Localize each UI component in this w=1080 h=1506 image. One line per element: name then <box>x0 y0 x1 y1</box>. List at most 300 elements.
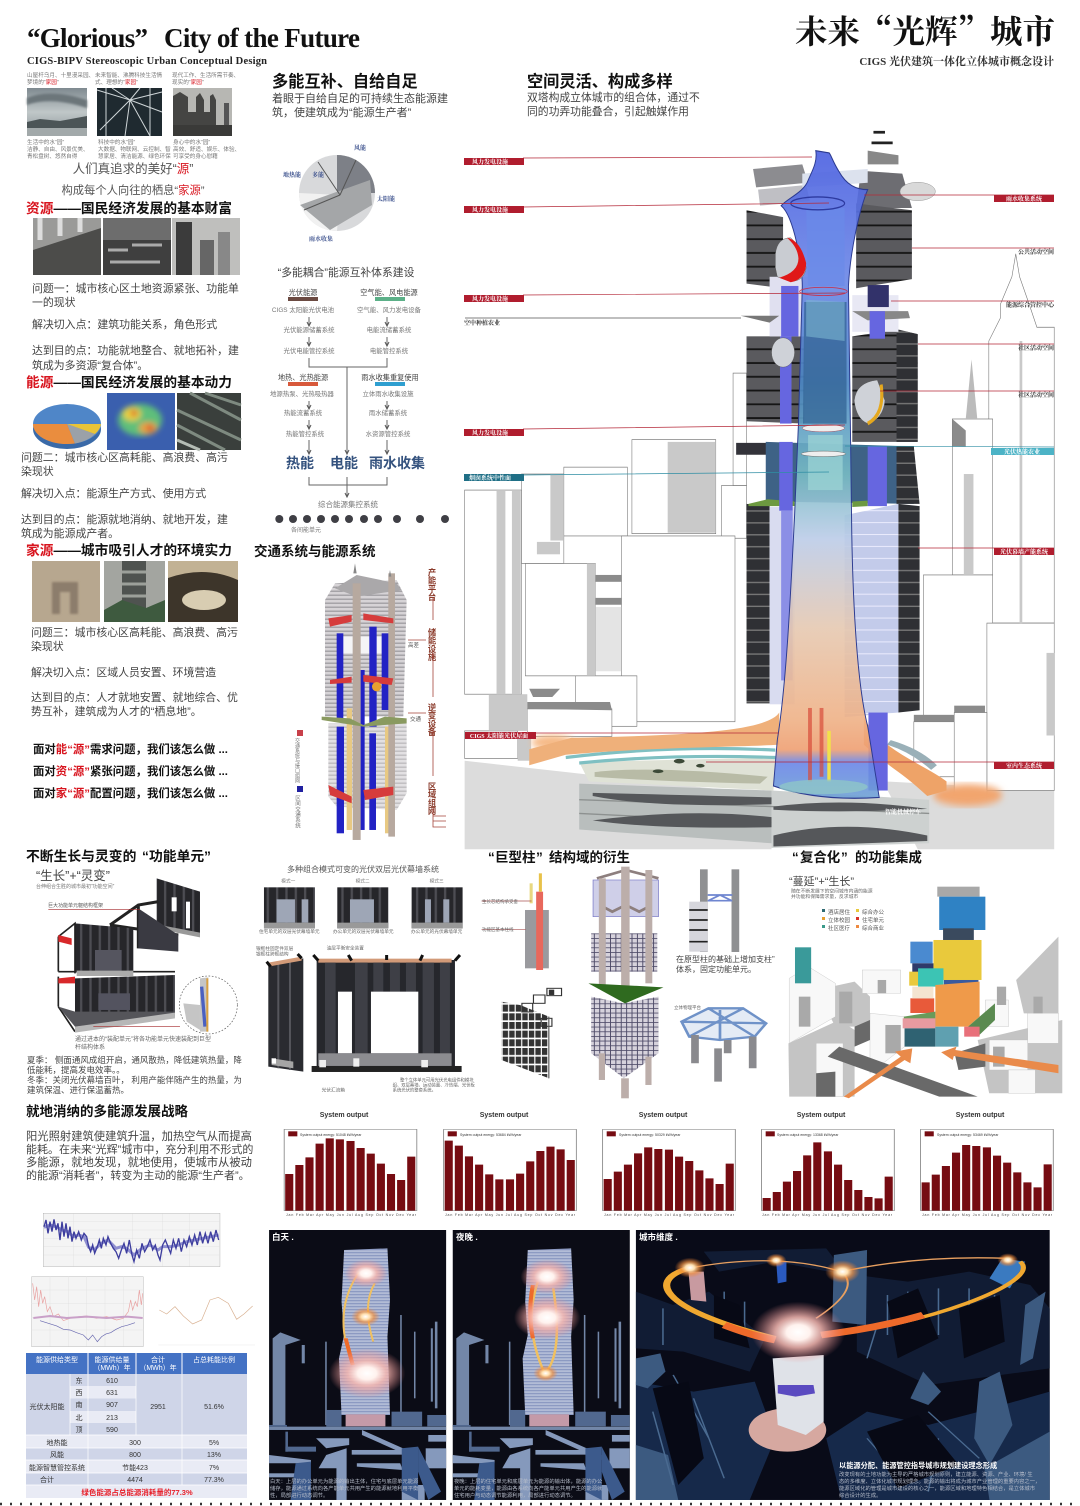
text: local consumption strategy: 的能源“消耗者”，转变为主动的能源“生产者”。 <box>26 1168 250 1182</box>
text: local consumption strategy: 阳光照射建筑使建筑升温，加热空气从而提高 <box>26 1129 252 1143</box>
column notes <box>482 898 701 1011</box>
flow: rain branch: 雨水储蓄系统 <box>369 408 408 417</box>
line chart: monthly curve <box>158 1297 255 1345</box>
panel labels: 城市维度 . <box>639 1232 678 1242</box>
subheading: “生长”+“灵变” <box>36 868 110 883</box>
problem text: 染现状 <box>21 464 54 478</box>
table rows: 590 <box>106 1427 118 1434</box>
caption row top <box>27 71 239 86</box>
heading: ” <box>204 849 211 864</box>
roof truss <box>682 1008 766 1082</box>
heading: 的功能集成 <box>855 849 922 865</box>
table rows: 北 <box>76 1414 82 1422</box>
table rows: 610 <box>106 1378 118 1385</box>
table rows: 300 <box>129 1440 141 1447</box>
note <box>791 888 873 900</box>
chart titles: System output <box>480 1112 529 1119</box>
photo: skyline <box>173 88 232 136</box>
left callout labels: 风力发电设施 <box>472 158 508 166</box>
panel notes: 白天：上层的办公单元为能源的输出主体，住宅与底层单元能源 <box>270 1477 419 1485</box>
chart titles: System output <box>320 1112 369 1119</box>
panel: function unit <box>26 848 242 1095</box>
table header: 能源供给类型 <box>36 1355 78 1364</box>
flow: geothermal branch: 热能流蓄系统 <box>284 408 323 417</box>
problem text: 染现状 <box>31 639 64 653</box>
season text: 夏季： 侧面通风成组开启，通风散热，降低建筑热量，降 <box>27 1055 242 1065</box>
heat map <box>107 393 175 450</box>
city scale note: 以能源分配、能源管控指导城市规划建设理念形成 <box>839 1461 997 1470</box>
caption row top: 现实的“家园” <box>172 78 204 86</box>
panel: resources <box>26 200 240 372</box>
table rows <box>26 1374 247 1498</box>
blue columns <box>779 286 888 791</box>
heading: “ <box>488 850 495 865</box>
legend and month labels: Jan Feb Mar Apr May Jun Jul Aug Sep Oct Nov Dec Year <box>922 1213 1053 1217</box>
column notes: 生长芯结构承受垂 <box>482 898 518 905</box>
legend and month labels: System output energy: 53469 kWh/year <box>937 1133 999 1137</box>
heading: energy complement <box>272 72 448 119</box>
diagram: transport tower <box>294 563 446 840</box>
problem text: 一的现状 <box>32 295 76 309</box>
right callout labels: 公共活动空间 <box>1018 248 1054 256</box>
main mega column tower <box>588 867 663 1098</box>
note: 并功能和保障需求量，反求城市 <box>791 893 858 900</box>
diagram: multi-energy circle: 多能 <box>312 171 324 179</box>
captions below photos: 洁静、自由、风景优美、 <box>27 145 89 153</box>
right annotation labels: 逆变设备 <box>427 702 437 737</box>
plaza with water <box>566 749 775 791</box>
heading: 不断生长与灵变的 <box>26 848 137 864</box>
table rows: 合计 <box>40 1475 54 1484</box>
problem text: 解决切入点：区域人员安置、环境营造 <box>31 665 216 679</box>
table rows: 东 <box>76 1376 82 1385</box>
basement <box>579 784 929 848</box>
legend: 综合商业 <box>862 924 885 932</box>
panel: mega column <box>482 849 775 1098</box>
captions below photos: 身心中的水“园” <box>173 138 210 146</box>
line chart: annual temperature <box>43 1213 220 1267</box>
heading: 资源——国民经济发展的基本财富 <box>26 200 232 216</box>
table rows: 51.6% <box>204 1404 224 1411</box>
right annotation labels: 产能平台 <box>427 567 437 602</box>
diagram: multi-energy circle: 风能 <box>354 144 366 152</box>
chart titles <box>320 1112 1005 1119</box>
heading: flexible space: 双塔构成立体城市的组合体，通过不 <box>527 90 700 104</box>
legend: 立体校园 <box>828 916 851 924</box>
bar chart 1 <box>284 1129 417 1211</box>
table rows: 节能423 <box>122 1463 148 1472</box>
table footnote: 绿色能源占总能源消耗量的77.3% <box>81 1487 193 1497</box>
outputs: 雨水收集 <box>369 455 425 471</box>
questions list: 面对家“源”配置问题，我们该怎么做 ... <box>33 786 228 800</box>
legend: 交通系统与接口组网 <box>294 737 300 784</box>
questions list: 面对能“源”需求问题，我们该怎么做 ... <box>33 742 228 756</box>
problem text: 解决切入点：能源生产方式、使用方式 <box>21 486 206 500</box>
bar chart 5 <box>921 1129 1053 1211</box>
chart titles: System output <box>797 1112 846 1119</box>
panel notes <box>270 1477 603 1499</box>
facade section drawing: 光伏汇流箱 <box>322 1087 345 1094</box>
braced column detail <box>689 869 739 952</box>
legend and month labels: System output energy: 50329 kWh/year <box>619 1133 681 1137</box>
heading: ” <box>841 850 848 865</box>
table rows: 4474 <box>127 1477 143 1484</box>
subheading: “蔓延”+“生长” <box>789 874 854 888</box>
table rows: 光伏太阳能 <box>30 1402 64 1411</box>
table rows: 213 <box>106 1415 118 1422</box>
outputs <box>286 455 425 471</box>
right annotation labels: 储能设施 <box>427 627 437 662</box>
outputs: 热能 <box>286 455 314 471</box>
panel: three sources intro <box>27 71 240 176</box>
table rows: 5% <box>209 1440 219 1447</box>
caption row top: 现代工作、生活所需节奏、 <box>172 71 239 79</box>
captions below photos: 大数据、物联网、云控制、智 <box>98 145 171 153</box>
heading: energy complement: 着眼于自给自足的可持续生态能源建 <box>272 91 448 105</box>
three modes: 模式三 <box>430 878 444 885</box>
text: local consumption strategy: 多能源，就地发现，就地使用，使城市从被动 <box>26 1155 252 1169</box>
note: 台伸组合生胜的城市最初“功能空间” <box>36 883 115 890</box>
diagram: multi-energy circle: 雨水收集 <box>309 235 333 243</box>
right callout labels: 光伏幕墙产能系统 <box>1000 548 1049 556</box>
right callout labels: 智能机械停车 <box>885 808 921 816</box>
flow: wind branch: 空气能、风电能源 <box>360 288 418 297</box>
panel: city scale <box>636 1230 1050 1500</box>
title: English: CIGS-BIPV Stereoscopic Urban Conceptual Design <box>27 56 267 67</box>
legend and month labels: System output energy: 51048 kWh/year <box>300 1133 362 1137</box>
questions list <box>33 742 228 800</box>
problem text: 达到目的点：人才就地安置、就地综合、优 <box>31 690 238 704</box>
city scale note: 态的多维度、立体化城市规划理念。能源的输出将成为城市产业管理的重要内容之一， <box>839 1477 1040 1485</box>
panel: home <box>26 542 238 718</box>
column notes: 立体物理平台 <box>674 1004 701 1011</box>
legend and month labels: System output energy: 53684 kWh/year <box>460 1133 522 1137</box>
flow: wind branch: 电能流储蓄系统 <box>367 325 412 334</box>
panel notes: 性，局部进行动态调节。 <box>270 1491 328 1499</box>
line chart: heating and cooling loads <box>32 1277 143 1347</box>
tower massing <box>903 887 995 1047</box>
title: English: “Glorious” <box>27 23 148 53</box>
three modes <box>259 878 463 935</box>
pie chart <box>33 404 101 449</box>
captions below photos: 青松盘树、悠然自得 <box>27 152 78 160</box>
flow: PV branch: 光伏能源储蓄系统 <box>283 325 335 334</box>
problem text: 问题三：城市核心区高耗能、高浪费、高污 <box>31 625 238 639</box>
city scale note: 综合设计的生成。 <box>839 1491 881 1499</box>
table rows: 77.3% <box>204 1477 224 1484</box>
flow: rain branch: 水资源管控系统 <box>366 429 411 438</box>
table header: 能源供给量 <box>94 1355 130 1364</box>
city scale note: 改变现有的土地功能为主导的严格城市规划原则，建立能源、资源、产业、环境/ 生 <box>839 1470 1033 1478</box>
caption row top: 式、理想的“家园” <box>95 78 138 86</box>
table rows: 7% <box>209 1465 219 1472</box>
season text: 冬季：关闭光伏幕墙百叶， 利用产能伴随产生的热量，为 <box>27 1075 242 1085</box>
season text: 低能耗，提高发电效率。。 <box>27 1065 125 1075</box>
legend and month labels: Jan Feb Mar Apr May Jun Jul Aug Sep Oct Nov Dec Year <box>445 1213 576 1217</box>
three modes: 办公单元的双层光伏幕墙单元 <box>333 928 394 935</box>
assembly note: 通过进本的“装配单元”将各功能单元快速装配到巨型 <box>75 1035 211 1043</box>
problem text: 解决切入点：建筑功能关系，角色形式 <box>32 317 217 331</box>
title: Chinese: 未来“光辉”城市 <box>795 7 1055 53</box>
panel: compound functions <box>788 849 1062 1098</box>
column explanatory text: 在原型柱的基础上增加支柱” <box>676 954 775 964</box>
text: beautiful source: 人们真追求的美好“源” <box>73 161 193 176</box>
table rows: 顶 <box>76 1426 82 1434</box>
panel notes: 住宅用户与动态调节能源利用，局部进行动态调节。 <box>454 1491 576 1499</box>
flow: PV branch: 光伏能源 <box>289 288 317 297</box>
heading: “ <box>792 850 799 865</box>
flow: PV branch: 光伏电能管控系统 <box>283 346 335 355</box>
three modes: 模式二 <box>356 878 370 885</box>
panel: hero cutaway tower <box>464 132 1055 849</box>
facade section drawing: 银框柱固定件双层 <box>256 945 294 952</box>
captions below photos: 生活中的水“园” <box>27 138 64 146</box>
right callout labels: 室内生态系统 <box>1006 762 1043 770</box>
orange arrows <box>844 1047 1058 1098</box>
photo: misty harbour <box>27 88 87 136</box>
problem text: 达到目的点：功能就地整合、就地拓补，建 <box>32 343 239 357</box>
panel notes: 夜晚：上层的住宅单元和底层单元为能源的输出体，能源的办公 <box>454 1477 603 1485</box>
panel notes: 储存，能源通过系统向各产能单元共用产生的能源就地利用平衡 <box>270 1484 419 1492</box>
central glass funnel <box>773 151 879 798</box>
flow: rain branch <box>361 373 419 438</box>
flow connectors <box>309 317 387 497</box>
funnel interior <box>779 197 868 794</box>
table rows: 631 <box>106 1390 118 1397</box>
flow: wind branch: 电能管控系统 <box>370 346 409 355</box>
city model with coloured tower <box>788 887 1062 1098</box>
unit grid <box>502 988 562 1078</box>
captions below photos: 可享受的身心慰藉 <box>173 152 218 160</box>
heading: energy complement: 筑，使建筑成为“能源生产者” <box>272 105 412 119</box>
panel: energy <box>21 374 241 540</box>
facade section drawing: 组、双层幕墙、运动装置、冷热端、光伏板 <box>393 1082 476 1089</box>
right annotation labels: 区域组网 <box>427 782 437 816</box>
problem text <box>21 450 228 540</box>
right annotation labels: 交通 <box>410 715 422 723</box>
flow: wind branch <box>357 288 422 355</box>
problem text <box>32 281 239 372</box>
note: 随在不断发展下的空间城市内涵的能源 <box>791 888 873 894</box>
three modes: 住宅单元的双层光伏幕墙单元 <box>259 928 320 935</box>
season text: 建筑保温、进行保温蓄热。 <box>27 1085 129 1095</box>
diagram: multi-energy circle <box>283 144 395 243</box>
left callout labels: 风力发电设施 <box>472 429 508 437</box>
flow: PV branch: CIGS 太阳能光伏电池 <box>272 305 335 314</box>
assembly note <box>75 1035 211 1051</box>
surrounding city massing <box>465 254 1054 849</box>
right callout labels: 社区活动空间 <box>1018 391 1054 399</box>
flow: geothermal branch <box>270 373 335 438</box>
left callout labels: 空中种植农业 <box>464 319 500 327</box>
problem text: 问题一：城市核心区土地资源紧张、功能单 <box>32 281 239 295</box>
right annotation labels: 高差 <box>408 641 420 649</box>
table header: （MWh）年 <box>93 1363 131 1372</box>
flow: geothermal branch: 热能管控系统 <box>286 429 325 438</box>
captions below photos: 高效、舒适、娱乐、体验、 <box>173 145 240 153</box>
diagram: multi-energy circle: 太阳能 <box>377 195 395 203</box>
legend and month labels: System output energy: 13368 kWh/year <box>777 1133 839 1137</box>
captions below photos: 慧家居、清洁能源、绿色环保 <box>98 152 171 160</box>
legend: 区间交通系统 <box>294 795 301 829</box>
legend: 综合办公 <box>862 908 885 916</box>
three modes: 办公单元的光伏幕墙单元 <box>411 928 463 935</box>
bar chart 4 <box>762 1129 894 1211</box>
column notes: 功能区基本柱线 <box>482 926 514 933</box>
right callout labels: 能源综合管控中心 <box>1006 301 1055 309</box>
panel labels: 白天 . <box>272 1232 294 1242</box>
small teal tower <box>795 947 811 983</box>
text: home source: 构成每个人向往的栖息“家源” <box>61 183 205 197</box>
heading: 能源——国民经济发展的基本动力 <box>26 374 232 390</box>
problem text <box>31 625 238 718</box>
caption row top: 梦境的“家园” <box>27 78 59 86</box>
season text <box>27 1055 242 1095</box>
problem text: 势互补，建筑成为人才的“栖息地”。 <box>31 704 202 718</box>
heading: ” <box>536 850 543 865</box>
flow: geothermal branch: 地热、光热能源 <box>278 373 328 382</box>
heading: 复合化 <box>800 849 841 865</box>
left callout labels: 风力发电设施 <box>472 295 508 303</box>
heading: energy complement: 多能互补、自给自足 <box>272 72 418 91</box>
title: English <box>27 23 360 67</box>
heading: “ <box>142 849 149 864</box>
panel notes: 单元的能耗变量，能源由各系统向各产能单元共用产生的能源就 <box>454 1484 603 1492</box>
column explanatory text: 体系，固定功能单元。 <box>676 964 756 974</box>
orange ramps <box>529 713 1002 806</box>
legend and month labels: Jan Feb Mar Apr May Jun Jul Aug Sep Oct Nov Dec Year <box>604 1213 735 1217</box>
flow: geothermal branch: 地源热泵、光热吸热器 <box>270 389 335 398</box>
panel: night tower <box>453 1230 630 1500</box>
legend <box>294 730 303 829</box>
legend: 住宅单元 <box>862 916 885 924</box>
panel labels <box>272 1232 678 1242</box>
title: 多种组合模式可变的光伏双层光伏幕墙系统 <box>287 864 439 874</box>
right callout labels: 社区活动空间 <box>1018 344 1054 352</box>
three modes: 模式一 <box>281 878 296 885</box>
caption row top: 未来智能、沸腾科技生活情 <box>95 71 163 79</box>
problem text: 问题二：城市核心区高耗能、高浪费、高污 <box>21 450 228 464</box>
problem text: 筑成为能源成产者。 <box>21 526 119 540</box>
outputs: 电能 <box>330 455 358 471</box>
table header: 合计 <box>151 1355 165 1364</box>
table rows: 800 <box>129 1452 141 1459</box>
table header <box>26 1353 247 1374</box>
title: Chinese: CIGS 光伏建筑一体化立体城市概念设计 <box>859 54 1054 68</box>
facade section drawing: 银框柱跨框结构 <box>256 951 289 958</box>
heading: flexible space: 空间灵活、构成多样 <box>527 72 673 91</box>
photo: tech grid <box>97 88 162 136</box>
column explanatory text <box>676 954 775 974</box>
left callout labels: CIGS 太阳能光伏屋面 <box>470 732 528 740</box>
panel: facade system <box>256 864 476 1094</box>
caption row top: 山屋杆乌月、十里漫采园、 <box>27 71 94 79</box>
table header: 占总耗能比例 <box>193 1355 235 1364</box>
diagram: multi-energy circle: 地热能 <box>283 171 301 179</box>
left callout labels: 烟囱系统中性面 <box>468 474 511 482</box>
facade section drawing: 系统光伏的整套系统。 <box>393 1087 436 1094</box>
photos <box>33 218 240 275</box>
text: local consumption strategy <box>26 1103 253 1182</box>
table rows: 2951 <box>150 1404 166 1411</box>
building cutaway <box>465 132 1054 849</box>
table: energy supply <box>26 1353 247 1498</box>
unit hexagons <box>275 515 449 523</box>
table rows: 地热能 <box>46 1438 68 1447</box>
heading: flexible space: 同的功弄功能叠合，引起触媒作用 <box>527 104 689 118</box>
table rows: 南 <box>76 1400 82 1409</box>
bar chart 2 <box>444 1129 576 1211</box>
legend and month labels: Jan Feb Mar Apr May Jun Jul Aug Sep Oct Nov Dec Year <box>762 1213 893 1217</box>
callout: 巨大功能单元躯结构框架 <box>48 902 103 909</box>
bar chart 3 <box>603 1129 735 1211</box>
legend and month labels: Jan Feb Mar Apr May Jun Jul Aug Sep Oct Nov Dec Year <box>286 1213 417 1217</box>
left callout labels <box>464 158 536 740</box>
right callout labels: 光伏热能农业 <box>1004 448 1040 456</box>
facade section drawing: 整个立体单元可用光伏光电组件和模块 <box>400 1076 474 1083</box>
problem text: 筑成为多资源“复合体”。 <box>32 358 148 372</box>
chart titles: System output <box>956 1112 1005 1119</box>
heading: flexible space <box>527 72 700 118</box>
problem text: 达到目的点：能源就地消纳、就地开发，建 <box>21 512 228 526</box>
table rows: 西 <box>76 1389 82 1397</box>
flow: multi-energy system <box>270 265 449 534</box>
right callout labels <box>885 195 1055 816</box>
panel labels: 夜晚 . <box>456 1232 478 1242</box>
table rows: 907 <box>106 1402 118 1409</box>
title: English: City of the Future <box>164 23 360 53</box>
heading: 巨型柱 <box>495 849 536 865</box>
chart titles: System output <box>639 1112 688 1119</box>
red and yellow capsules <box>772 238 885 424</box>
flow: rain branch: 雨水收集重复使用 <box>361 373 419 382</box>
legend and month labels <box>286 1133 1053 1217</box>
heading: transport and energy: 交通系统与能源系统 <box>254 543 376 559</box>
captions below photos: 科技中的水“园” <box>98 138 135 146</box>
right annotation labels <box>408 567 446 827</box>
table rows: 能源智慧管控系统 <box>29 1463 85 1472</box>
unit label: 各间能单元 <box>291 526 321 534</box>
text: local consumption strategy: 就地消纳的多能源发展战略 <box>26 1103 188 1119</box>
dark facade blocks <box>736 132 935 717</box>
flow: wind branch: 空气能、风力发电设备 <box>357 305 422 314</box>
captions below photos <box>27 138 240 160</box>
heading: 结构域的衍生 <box>549 849 630 865</box>
heading: 家源——城市吸引人才的环境实力 <box>26 542 232 558</box>
table header: （MWh）年 <box>139 1363 177 1372</box>
heading: 功能单元 <box>149 848 204 864</box>
table rows: 13% <box>207 1452 221 1459</box>
panel: daytime tower <box>269 1230 446 1500</box>
flow title: “多能耦合”能源互补体系建设 <box>278 265 415 279</box>
right callout labels: 雨水收集系统 <box>1006 195 1043 203</box>
table rows: 风能 <box>50 1450 64 1459</box>
flow: PV branch <box>272 288 335 355</box>
leader lines <box>465 157 1054 762</box>
text: local consumption strategy: 能耗。在未来“光辉”城市中，充分利用不形式的 <box>26 1142 253 1156</box>
city scale note: 能源区域化的管理是城市建设的核心之一，能源区域和地理特色相结合，是立体城市 <box>839 1484 1036 1492</box>
legend: 酒店居住 <box>828 908 851 916</box>
facade section drawing: 油层平衡安全装置 <box>327 945 364 952</box>
facade section drawing <box>256 945 476 1094</box>
module drawing <box>48 878 237 1034</box>
flow: rain branch: 立体雨水收集设施 <box>362 389 414 398</box>
questions list: 面对资“源”紧张问题，我们该怎么做 ... <box>33 764 228 778</box>
assembly note: 杆结构体系 <box>75 1043 105 1051</box>
photo: highway <box>177 393 241 450</box>
city scale note <box>839 1461 1040 1499</box>
legend <box>822 908 885 932</box>
